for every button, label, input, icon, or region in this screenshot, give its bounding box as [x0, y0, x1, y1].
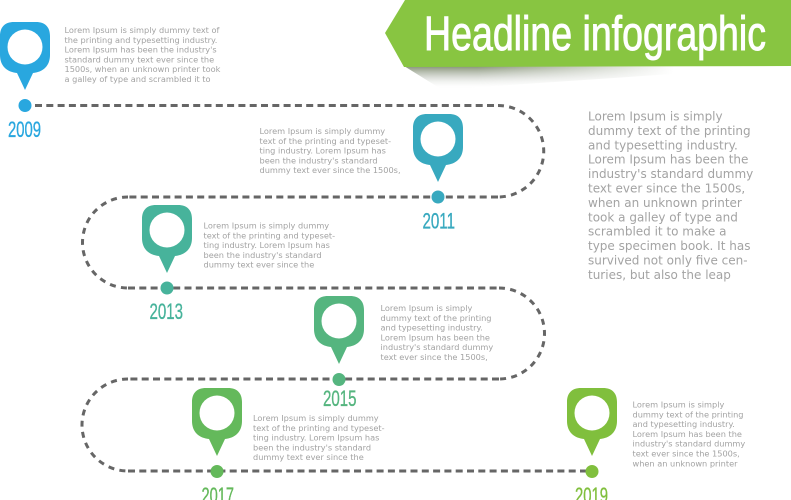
right paragraph: survived not only five cen- — [588, 254, 748, 268]
icon: pin 2011 — [413, 114, 463, 182]
text 2013: ting industry. Lorem Ipsum has — [204, 240, 330, 250]
header banner — [385, 0, 791, 89]
text 2009: a galley of type and scrambled it to — [64, 74, 211, 84]
text 2009: the printing and typesetting industry. — [64, 35, 217, 45]
text 2019: Lorem Ipsum is simply — [632, 400, 725, 410]
text 2017: dummy text ever since the — [253, 452, 364, 462]
text 2015: dummy text of the printing — [380, 313, 491, 323]
text 2009: 1500s, when an unknown printer took — [64, 64, 221, 74]
right paragraph: took a galley of type and — [588, 210, 738, 224]
text 2017: been the industry's standard — [253, 442, 371, 452]
year 2009: 2009 — [8, 117, 41, 142]
milestone 2013 — [142, 205, 338, 324]
icon: pin 2015 — [314, 296, 364, 364]
icon: pin 2019 — [567, 388, 617, 456]
text 2011: Lorem Ipsum is simply dummy — [260, 126, 385, 136]
text 2017: ting industry. Lorem Ipsum has — [253, 433, 379, 443]
right paragraph: text ever since the 1500s, — [588, 182, 745, 196]
text 2017: text of the printing and typeset- — [253, 423, 385, 433]
icon: pin 2017 — [192, 388, 242, 456]
banner shadow — [406, 66, 661, 84]
year 2013: 2013 — [150, 299, 183, 324]
text 2015: and typesetting industry. — [380, 323, 483, 333]
text 2015: industry's standard dummy — [380, 342, 493, 352]
text 2015: Lorem Ipsum is simply — [380, 303, 473, 313]
icon: pin 2013 — [142, 205, 192, 273]
milestone 2017 — [192, 388, 387, 500]
text 2013: Lorem Ipsum is simply dummy — [204, 220, 329, 230]
marker dot 2019 — [586, 465, 598, 478]
dashed timeline path — [35, 106, 586, 471]
text 2017: Lorem Ipsum is simply dummy — [253, 413, 379, 423]
text 2013: been the industry's standard — [204, 250, 322, 260]
right paragraph: scrambled it to make a — [588, 225, 726, 239]
text 2019: text ever since the 1500s, — [632, 448, 740, 458]
banner shape — [385, 0, 791, 67]
text 2009: Lorem Ipsum is simply dummy text of — [64, 25, 221, 35]
marker dot 2017 — [210, 465, 224, 478]
text 2019: industry's standard dummy — [632, 439, 745, 449]
milestone 2011 — [260, 114, 463, 234]
text 2019: and typesetting industry. — [632, 419, 735, 429]
text 2011: text of the printing and typeset- — [260, 136, 391, 146]
text 2011: been the industry's standard — [260, 155, 378, 165]
text 2019: Lorem Ipsum has been the — [632, 429, 742, 439]
text 2011: dummy text ever since the 1500s, — [260, 165, 401, 175]
right paragraph: industry's standard dummy — [588, 167, 753, 181]
text 2019: when an unknown printer — [632, 458, 738, 468]
right paragraph: Lorem Ipsum is simply — [588, 110, 723, 124]
text 2009: standard dummy text ever since the — [64, 54, 214, 64]
milestone 2019 — [567, 388, 748, 500]
text 2015: text ever since the 1500s, — [380, 352, 488, 362]
marker dot 2015 — [332, 373, 346, 386]
text 2011: ting industry. Lorem Ipsum has — [260, 146, 386, 156]
right paragraph: turies, but also the leap — [588, 268, 731, 282]
marker dot 2013 — [160, 282, 174, 294]
icon: pin 2009 — [0, 22, 50, 90]
year 2011: 2011 — [422, 208, 455, 234]
right paragraph: and typesetting industry. — [588, 138, 738, 152]
text 2009: Lorem Ipsum has been the industry's — [64, 45, 217, 55]
year 2015: 2015 — [323, 386, 356, 411]
right paragraph: type specimen book. It has — [588, 239, 750, 253]
text 2013: dummy text ever since the — [204, 260, 314, 270]
milestone 2009 — [0, 22, 223, 142]
right paragraph: when an unknown printer — [588, 196, 742, 210]
marker dot 2009 — [18, 99, 32, 112]
right paragraph: Lorem Ipsum has been the — [588, 153, 748, 167]
right paragraph: dummy text of the printing — [588, 124, 751, 138]
marker dot 2011 — [432, 190, 444, 204]
milestone 2015 — [314, 296, 496, 411]
text 2015: Lorem Ipsum has been the — [380, 332, 490, 342]
text 2013: text of the printing and typeset- — [204, 230, 335, 240]
text 2019: dummy text of the printing — [632, 409, 743, 419]
